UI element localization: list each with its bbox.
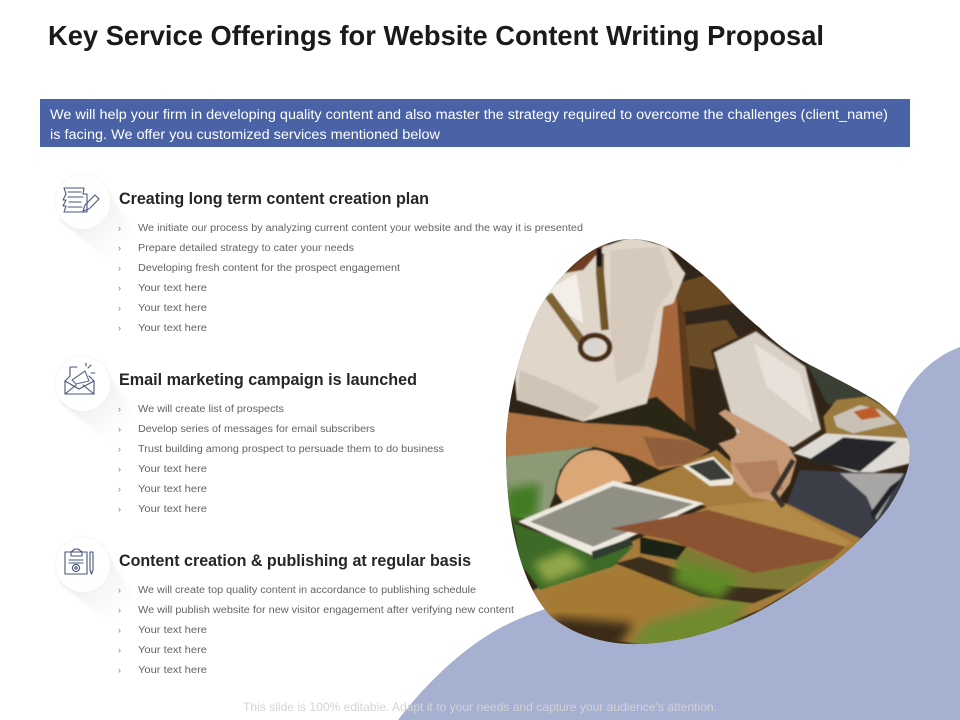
- bullet list: [118, 585, 514, 676]
- bullet list: We will create top quality content in accordance to publishing schedule: [138, 585, 476, 596]
- bullet list: Trust building among prospect to persuade them to do business: [138, 444, 444, 455]
- bullet list: Your text here: [138, 625, 207, 636]
- heading: Email marketing campaign is launched: [119, 370, 417, 389]
- footer note: This slide is 100% editable. Adapt it to your needs and capture your audience's attention.: [243, 700, 717, 714]
- bullet list: ›: [118, 243, 121, 253]
- bullet list: We initiate our process by analyzing current content your website and the way it is presented: [138, 223, 583, 234]
- bullet list: Develop series of messages for email subscribers: [138, 424, 375, 435]
- bullet list: ›: [118, 283, 121, 293]
- bullet list: Your text here: [138, 303, 207, 314]
- panel: content publishing: [56, 538, 514, 676]
- panel: email marketing: [56, 356, 444, 515]
- bullet list: ›: [118, 585, 121, 595]
- bullet list: Your text here: [138, 283, 207, 294]
- intro banner: We will help your firm in developing quality content and also master the strategy required to overcome the challenges (client_name): [50, 107, 888, 122]
- bullet list: ›: [118, 504, 121, 514]
- bullet list: Your text here: [138, 464, 207, 475]
- intro banner: [40, 99, 910, 147]
- bullet list: ›: [118, 303, 121, 313]
- title: Key Service Offerings for Website Content Writing Proposal: [48, 20, 824, 51]
- bullet list: ›: [118, 323, 121, 333]
- bullet list: ›: [118, 404, 121, 414]
- bullet list: ›: [118, 665, 121, 675]
- bullet list: Prepare detailed strategy to cater your needs: [138, 243, 354, 254]
- bullet list: Your text here: [138, 645, 207, 656]
- icon: clipboard with gear and pencil: [56, 538, 135, 625]
- bullet list: ›: [118, 645, 121, 655]
- bullet list: ›: [118, 625, 121, 635]
- heading: Content creation & publishing at regular basis: [119, 551, 471, 570]
- heading: Creating long term content creation plan: [119, 189, 429, 208]
- bullet list: Your text here: [138, 323, 207, 334]
- panel: content creation plan: [56, 174, 583, 334]
- bullet list: Your text here: [138, 665, 207, 676]
- bullet list: ›: [118, 223, 121, 233]
- bullet list: [118, 404, 444, 515]
- bullet list: Developing fresh content for the prospect engagement: [138, 263, 400, 274]
- bullet list: ›: [118, 263, 121, 273]
- icon: envelope and megaphone: [56, 356, 135, 444]
- photo: meeting at a table with laptop: [500, 235, 915, 650]
- bullet list: [118, 223, 583, 334]
- bullet list: ›: [118, 484, 121, 494]
- bullet list: ›: [118, 605, 121, 615]
- intro banner: is facing. We offer you customized services mentioned below: [50, 127, 440, 142]
- bullet list: ›: [118, 424, 121, 434]
- bullet list: Your text here: [138, 484, 207, 495]
- icon: document and pencil: [56, 174, 135, 262]
- bullet list: We will create list of prospects: [138, 404, 284, 415]
- bullet list: ›: [118, 464, 121, 474]
- bullet list: We will publish website for new visitor engagement after verifying new content: [138, 605, 514, 616]
- bullet list: ›: [118, 444, 121, 454]
- background wave shape: [398, 347, 960, 720]
- bullet list: Your text here: [138, 504, 207, 515]
